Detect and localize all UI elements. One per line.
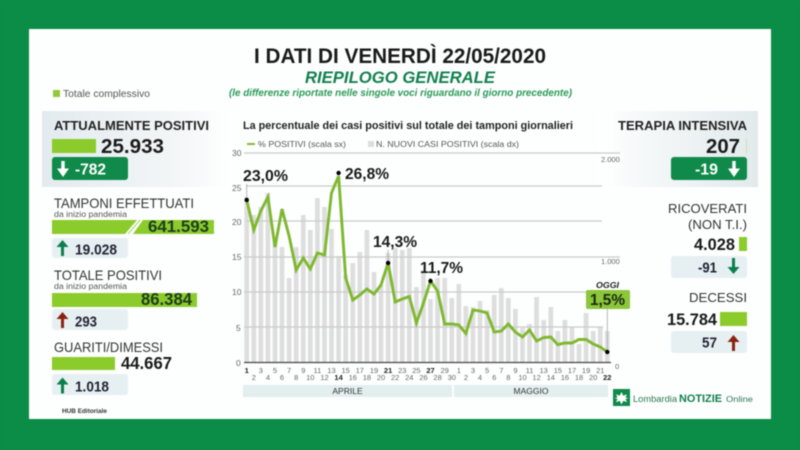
y axis right labels: 0 (615, 362, 619, 371)
logo: Lombardia Notizie Online: NOTIZIE (679, 393, 722, 405)
panel: decessi (667, 290, 747, 353)
panel: ricoverati: RICOVERATI (668, 201, 747, 216)
panel: totale positivi: 86.384 (141, 289, 192, 309)
y axis right labels: 2.000 (601, 155, 620, 164)
panel: tamponi effettuati: TAMPONI EFFETTUATI (54, 195, 194, 211)
x axis day labels: 22 (391, 373, 399, 382)
panel: ricoverati (668, 201, 747, 278)
panel: ricoverati: -91 (698, 260, 717, 276)
y axis left labels (232, 148, 242, 368)
month band: aprile: APRILE (332, 386, 363, 396)
logo: Lombardia Notizie Online: Lombardia (633, 394, 677, 404)
x axis day labels: 29 (441, 366, 449, 375)
panel: attualmente positivi: 25.933 (101, 136, 164, 158)
x axis day labels: 27 (426, 366, 435, 375)
x axis day labels: 11 (314, 366, 321, 375)
y axis left labels: 30 (232, 148, 242, 158)
x axis day labels: 17 (568, 366, 576, 375)
panel: tamponi effettuati: 19.028 (75, 242, 117, 258)
data points (244, 171, 610, 354)
panel: guariti dimessi (52, 339, 172, 396)
y axis right labels (601, 155, 620, 371)
x axis day labels: 21 (596, 366, 604, 375)
panel: ricoverati: (NON T.I.) (688, 217, 747, 232)
y axis left labels: 5 (236, 323, 241, 333)
x axis day labels: 6 (280, 373, 284, 382)
x axis day labels: 2 (252, 373, 256, 382)
x axis day labels: 20 (377, 373, 385, 382)
panel: totale positivi: da inizio pandemia (54, 281, 127, 291)
y axis right labels: 1.000 (601, 257, 620, 266)
chart legend: N. NUOVI CASI POSITIVI (scala dx) (376, 139, 519, 149)
panel: decessi: 57 (702, 334, 717, 352)
x axis day labels: 19 (582, 366, 590, 375)
x axis day labels (245, 366, 611, 382)
x axis day labels: 26 (419, 373, 428, 382)
y axis left labels: 0 (236, 358, 241, 368)
x axis day labels: 15 (554, 366, 562, 375)
panel: tamponi effettuati: 641.593 (148, 217, 209, 236)
x axis day labels: 18 (575, 373, 583, 382)
title: I DATI DI VENERDÌ 22/05/2020 (254, 43, 546, 68)
x axis day labels: 7 (287, 366, 291, 375)
panel: terapia intensiva: 207 (706, 136, 740, 158)
panel: totale positivi: TOTALE POSITIVI (54, 267, 162, 283)
panel: guariti dimessi: 1.018 (75, 380, 109, 396)
x axis day labels: 15 (342, 366, 350, 375)
x axis day labels: 13 (327, 366, 336, 375)
panel: decessi: DECESSI (689, 290, 747, 305)
x axis day labels: 5 (273, 366, 277, 375)
x axis day labels: 22 (603, 373, 611, 382)
panel: totale positivi: 293 (75, 314, 97, 330)
month band: aprile (243, 385, 452, 397)
data labels (243, 166, 463, 277)
panel: terapia intensiva: TERAPIA INTENSIVA (618, 118, 748, 133)
panel: terapia intensiva: -19 (695, 162, 718, 178)
x axis day labels: 4 (266, 373, 270, 382)
line: percent positive (247, 176, 607, 352)
x axis day labels: 21 (384, 366, 392, 375)
chart heading: La percentuale dei casi positivi sul totale dei tamponi giornalieri (243, 120, 573, 132)
chart legend (247, 139, 519, 149)
x axis day labels: 8 (294, 373, 298, 382)
bars: new positive cases (247, 193, 607, 362)
y axis left labels: 20 (232, 217, 242, 227)
x axis day labels: 18 (363, 373, 371, 382)
chart: positive share and new cases (232, 148, 630, 397)
panel: attualmente positivi: -782 (75, 162, 106, 178)
y axis left labels: 10 (232, 287, 242, 297)
panel: ricoverati: 4.028 (694, 236, 735, 254)
x axis day labels: 2 (464, 373, 468, 382)
panel: tamponi effettuati (52, 195, 214, 258)
note: differences: (le differenze riportate nelle singole voci riguardano il giorno precedente) (229, 88, 573, 99)
credit: HUB Editoriale (62, 408, 107, 415)
data labels: 26,8% (345, 166, 389, 183)
x axis day labels: 12 (532, 373, 541, 382)
x axis day labels: 3 (471, 366, 475, 375)
panel: terapia intensiva (598, 111, 758, 187)
legend: totale complessivo: Totale complessivo (63, 89, 150, 100)
x axis day labels: 17 (356, 366, 364, 375)
x axis day labels: 9 (513, 366, 517, 375)
data labels: 14,3% (373, 234, 417, 251)
callout: oggi: 1,5% (590, 292, 625, 309)
x axis day labels: 3 (259, 366, 263, 375)
x axis day labels: 20 (589, 373, 597, 382)
x axis day labels: 11 (526, 366, 533, 375)
x axis day labels: 24 (405, 373, 413, 382)
x axis day labels: 14 (334, 373, 344, 382)
month band: maggio: MAGGIO (514, 386, 549, 396)
panel: totale positivi (52, 267, 197, 330)
x axis day labels: 25 (412, 366, 421, 375)
chart legend: % POSITIVI (scala sx) (258, 139, 346, 149)
x axis day labels: 30 (448, 373, 456, 382)
x axis day labels: 16 (349, 373, 357, 382)
x axis day labels: 9 (301, 366, 305, 375)
x axis day labels: 1 (245, 366, 249, 375)
logo: Lombardia Notizie Online: Online (726, 394, 753, 404)
y axis left labels: 25 (232, 183, 242, 193)
x axis day labels: 10 (518, 373, 527, 382)
x axis day labels: 6 (492, 373, 496, 382)
panel: guariti dimessi: 44.667 (121, 353, 172, 373)
x axis day labels: 7 (499, 366, 503, 375)
x axis day labels: 14 (547, 373, 555, 382)
x axis day labels: 12 (320, 373, 329, 382)
x axis day labels: 13 (540, 366, 548, 375)
panel: tamponi effettuati: da inizio pandemia (54, 209, 127, 219)
callout: oggi (586, 281, 630, 309)
x axis day labels: 4 (478, 373, 482, 382)
panel: attualmente positivi (42, 111, 232, 187)
panel: decessi: 15.784 (667, 311, 718, 329)
x axis day labels: 19 (370, 366, 378, 375)
x axis day labels: 10 (306, 373, 314, 382)
x axis day labels: 1 (457, 366, 461, 375)
x axis day labels: 5 (485, 366, 489, 375)
y axis left labels: 15 (232, 252, 242, 262)
logo: Lombardia Notizie Online (613, 389, 753, 406)
callout: oggi: OGGI (596, 281, 620, 290)
data labels: 23,0% (243, 168, 288, 185)
x axis day labels: 23 (398, 366, 406, 375)
x axis day labels: 28 (433, 373, 442, 382)
panel: guariti dimessi: GUARITI/DIMESSI (54, 339, 163, 355)
subtitle: riepilogo generale: RIEPILOGO GENERALE (305, 68, 496, 87)
x axis day labels: 16 (561, 373, 569, 382)
leader lines (247, 184, 607, 352)
month band: maggio (454, 385, 608, 397)
data labels: 11,7% (420, 260, 463, 277)
panel: attualmente positivi: ATTUALMENTE POSITIVI (54, 118, 209, 133)
x axis day labels: 8 (506, 373, 510, 382)
